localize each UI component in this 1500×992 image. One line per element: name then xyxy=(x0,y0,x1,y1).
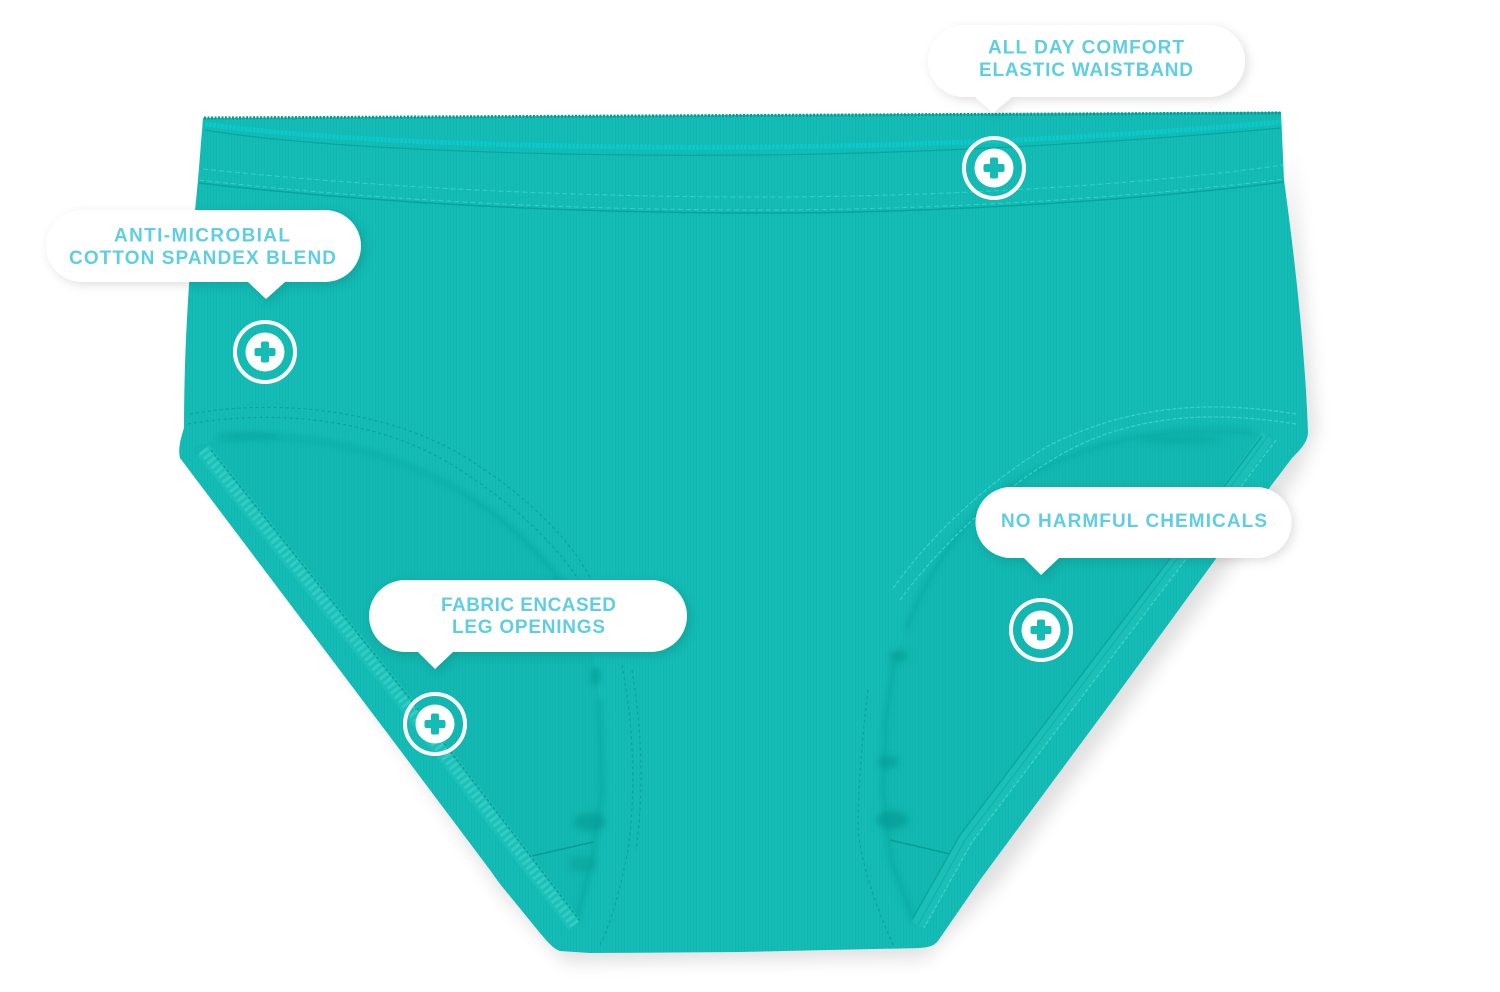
label: chemicals: NO HARMFUL CHEMICALS xyxy=(1001,511,1267,532)
label: leg openings: FABRIC ENCASED xyxy=(441,595,616,616)
dark creases xyxy=(222,433,1220,872)
label: waistband: ALL DAY COMFORT xyxy=(988,38,1184,58)
icon: plus marker chemicals xyxy=(1011,600,1071,660)
leg opening shading xyxy=(578,674,912,918)
right leg seam xyxy=(913,436,1276,928)
waistband xyxy=(199,113,1284,213)
label: waistband: ELASTIC WAISTBAND xyxy=(979,60,1193,81)
callout: elastic waistband xyxy=(928,25,1245,113)
callout: cotton blend xyxy=(46,210,361,299)
left leg opening xyxy=(192,438,603,922)
label: cotton blend: COTTON SPANDEX BLEND xyxy=(69,248,336,269)
icon: plus marker leg opening xyxy=(405,694,465,754)
right leg opening xyxy=(882,430,1275,922)
icon: plus marker fabric xyxy=(235,322,295,382)
garment xyxy=(170,100,1320,960)
callout: no harmful chemicals xyxy=(975,487,1291,575)
left leg seam xyxy=(203,450,581,925)
label: waistband xyxy=(979,38,1193,81)
label: cotton blend: ANTI-MICROBIAL xyxy=(114,226,290,246)
label: leg openings xyxy=(441,595,616,638)
callout: leg openings xyxy=(369,580,687,669)
icon: plus marker waistband xyxy=(964,138,1024,198)
garment shadow xyxy=(210,150,1316,962)
gusset lines xyxy=(532,840,950,856)
knit texture xyxy=(170,100,1320,960)
front stitching xyxy=(188,407,893,945)
label: leg openings: LEG OPENINGS xyxy=(452,617,605,638)
label: cotton blend xyxy=(69,226,336,269)
